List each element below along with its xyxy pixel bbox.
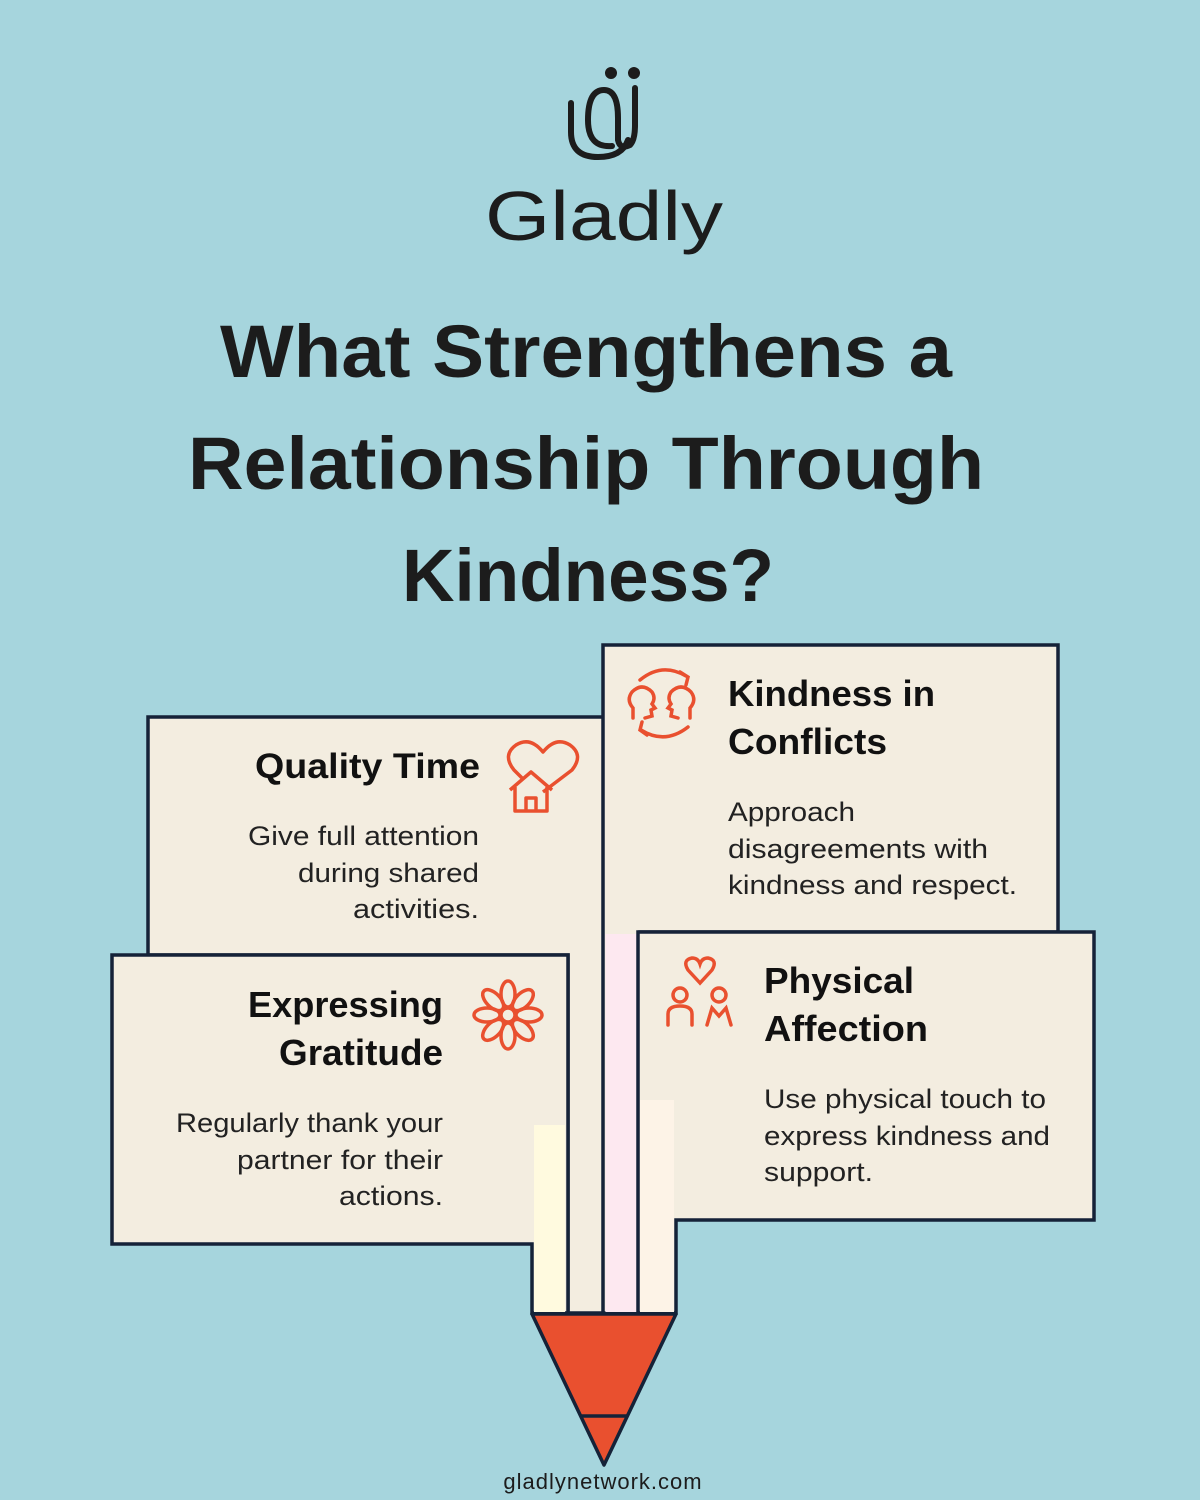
gratitude heading: Expressing xyxy=(248,984,443,1025)
panel: physical affection xyxy=(638,932,1094,1313)
kindness heading xyxy=(728,673,935,762)
footer url: gladlynetwork.com xyxy=(503,1469,703,1494)
quality time body: during shared xyxy=(298,858,479,888)
title: Kindness? xyxy=(402,534,774,617)
gratitude body: Regularly thank your xyxy=(176,1108,443,1138)
icon: two heads with arrows xyxy=(629,670,694,737)
quality time body xyxy=(248,821,479,924)
quality time heading: Quality Time xyxy=(255,747,480,786)
gratitude heading xyxy=(248,984,443,1073)
kindness body: Approach xyxy=(728,797,855,827)
title xyxy=(188,310,984,617)
physical heading: Affection xyxy=(764,1008,928,1049)
quality time body: activities. xyxy=(353,894,479,924)
title: What Strengthens a xyxy=(220,310,953,393)
physical body xyxy=(764,1084,1050,1187)
kindness heading: Conflicts xyxy=(728,721,887,762)
panel: quality time xyxy=(148,717,604,1313)
panel: expressing gratitude xyxy=(112,955,568,1313)
icon: couple with heart xyxy=(668,958,731,1025)
icon: flower xyxy=(474,981,542,1049)
kindness heading: Kindness in xyxy=(728,673,935,714)
gratitude body: actions. xyxy=(339,1181,443,1211)
physical heading: Physical xyxy=(764,960,914,1001)
icon: heart house xyxy=(508,742,578,811)
gratitude body: partner for their xyxy=(237,1145,443,1175)
physical heading xyxy=(764,960,928,1049)
title: Relationship Through xyxy=(188,422,984,505)
panel: kindness in conflicts xyxy=(603,645,1058,1313)
gratitude heading: Gratitude xyxy=(279,1032,443,1073)
physical body: express kindness and xyxy=(764,1121,1050,1151)
physical body: Use physical touch to xyxy=(764,1084,1046,1114)
kindness body: kindness and respect. xyxy=(728,870,1017,900)
icon: gladly logo xyxy=(571,70,637,157)
quality time body: Give full attention xyxy=(248,821,479,851)
gratitude body xyxy=(176,1108,443,1211)
pencil tip xyxy=(532,1314,676,1465)
kindness body xyxy=(728,797,1017,900)
logo wordmark: Gladly xyxy=(485,177,723,255)
physical body: support. xyxy=(764,1157,873,1187)
kindness body: disagreements with xyxy=(728,834,988,864)
